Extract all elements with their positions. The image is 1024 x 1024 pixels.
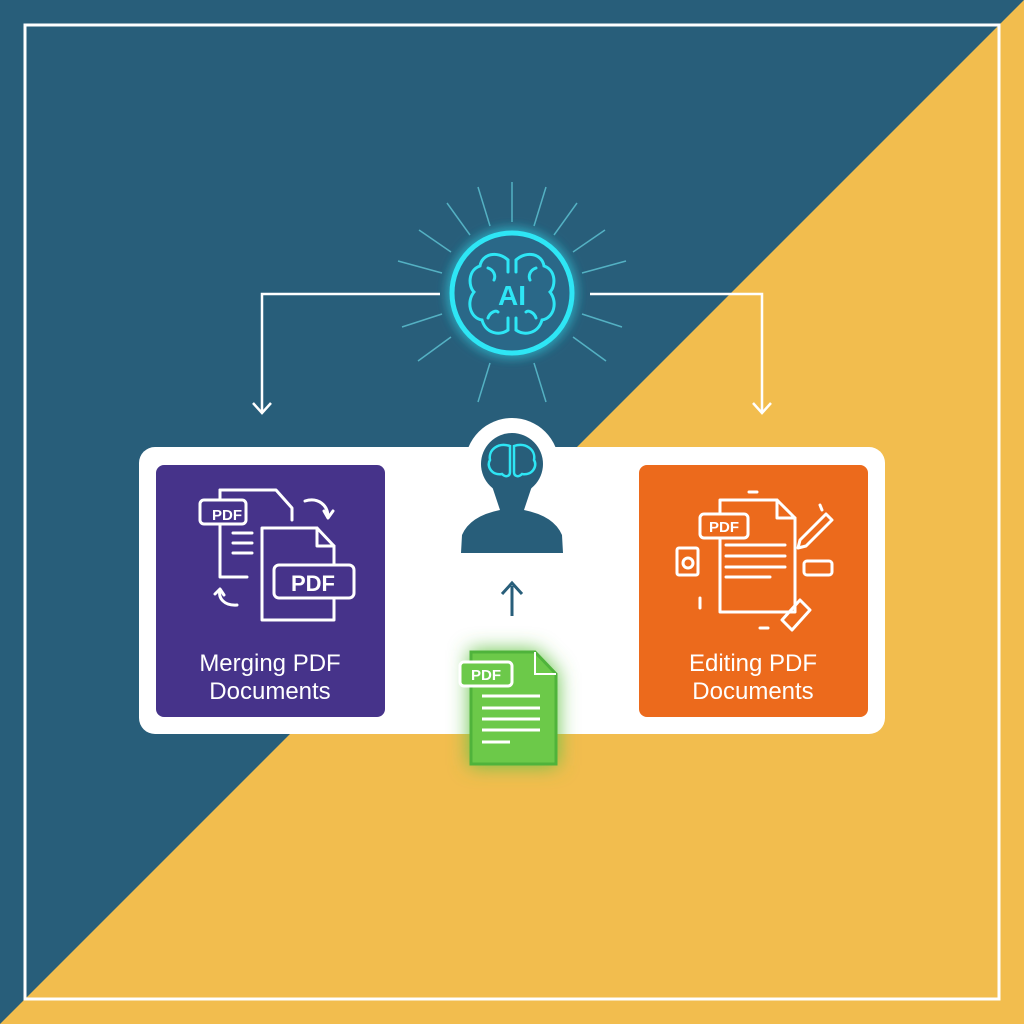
arrow: up to person <box>502 583 522 616</box>
icon: green PDF document <box>460 652 556 764</box>
icon: green PDF document: PDF <box>471 667 501 684</box>
icon: merging documents <box>200 490 354 620</box>
icon: person with brain <box>461 433 563 553</box>
panel: merging: PDF <box>212 507 242 524</box>
text: merging label: Merging PDF <box>199 650 341 677</box>
icon: editing document <box>677 492 832 630</box>
panel: editing: Documents <box>692 678 814 705</box>
arrow: right connector <box>590 294 771 413</box>
panel: merging: PDF <box>291 571 335 596</box>
panel: merging: Documents <box>209 678 331 705</box>
arrow: left connector <box>253 294 440 413</box>
white container panel <box>139 418 885 734</box>
panel: editing: PDF <box>709 519 739 536</box>
AI brain icon: AI <box>498 280 526 311</box>
panel: editing <box>639 465 868 717</box>
AI brain icon <box>398 182 626 402</box>
text: editing label: Editing PDF <box>689 650 817 677</box>
panel: merging <box>156 465 385 717</box>
